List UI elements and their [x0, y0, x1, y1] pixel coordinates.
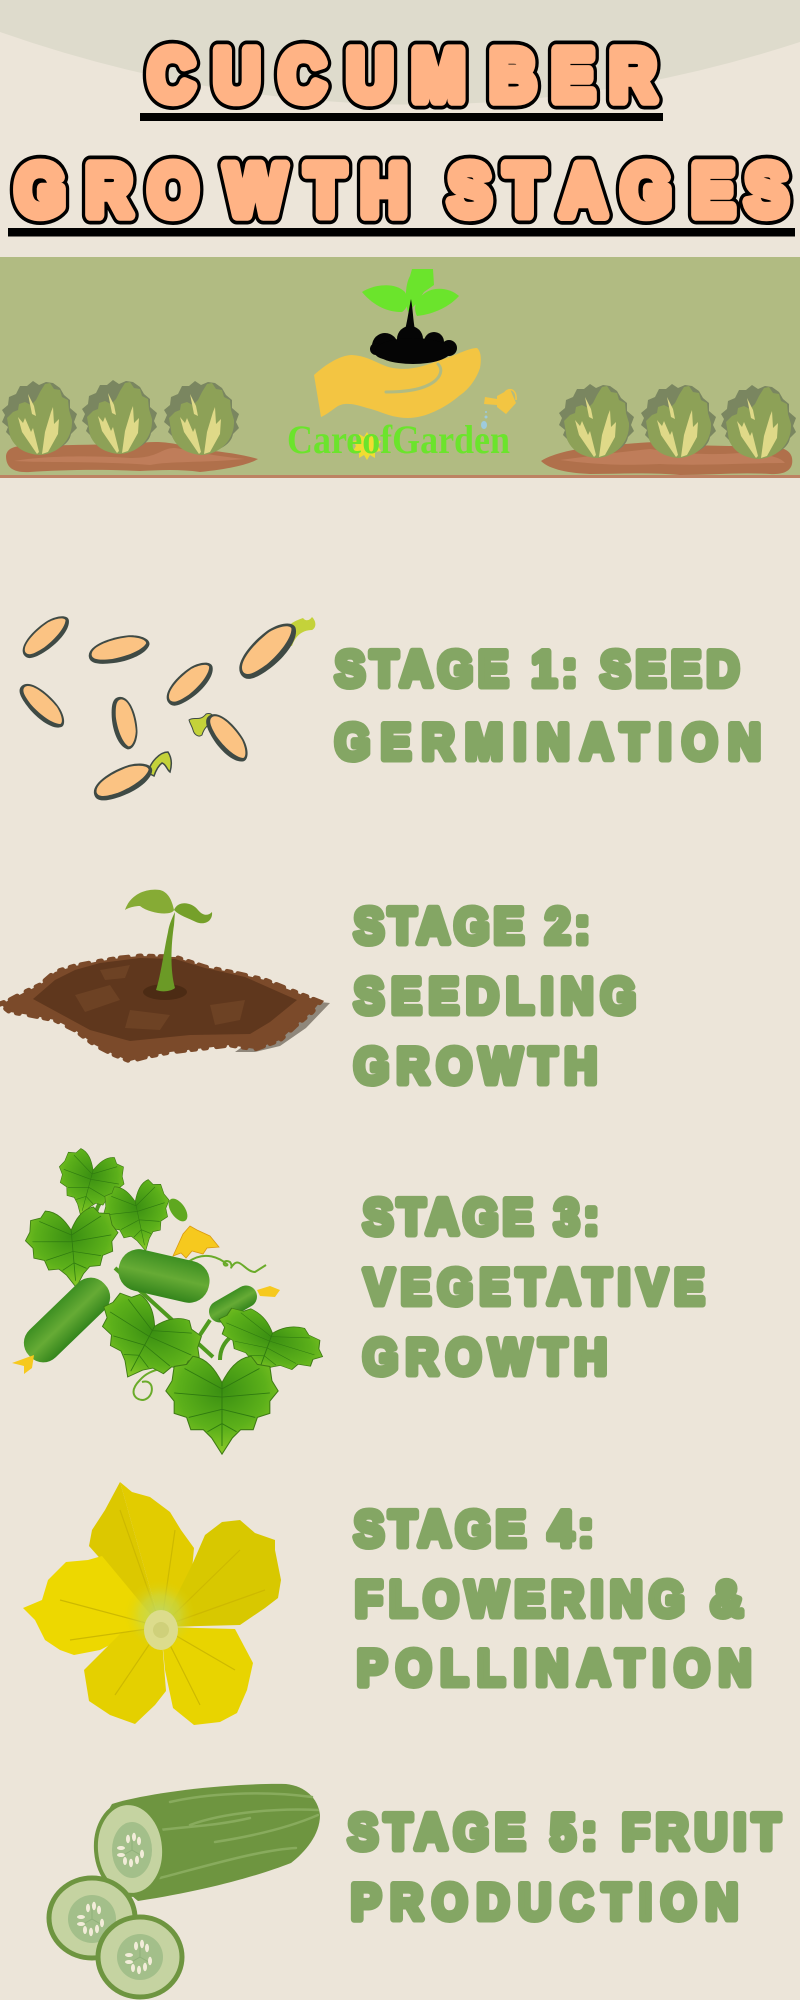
logo: care of garden [287, 269, 516, 462]
heading: stage 2: SEEDLING [354, 969, 636, 1025]
logo stem and soil [370, 299, 457, 364]
cucumber body [105, 1784, 320, 1901]
title line: growth stages: GROWTH STAGES [15, 151, 788, 231]
heading: stage 4 [354, 1502, 751, 1697]
lettuce row right [559, 384, 796, 459]
logo hand [314, 348, 481, 418]
logo watering can [481, 389, 516, 429]
heading: stage 2: STAGE 2: [354, 899, 590, 955]
heading: stage 5: PRODUCTION [351, 1875, 738, 1931]
banner panel [0, 257, 800, 478]
icon: seeds [15, 610, 315, 806]
logo wordmark: CareofGarden [287, 417, 510, 462]
heading: stage 4: FLOWERING & [355, 1572, 743, 1628]
slice 2 [49, 1878, 135, 1958]
stage 2: seedling growth [0, 890, 636, 1095]
title line: growth stages: GROWTH STAGES [15, 151, 788, 231]
title line: cucumber: CUCUMBER [149, 36, 656, 116]
stage 1: seed germination [15, 610, 761, 806]
title line: cucumber: CUCUMBER [149, 36, 656, 116]
heading: stage 3 [363, 1190, 704, 1386]
heading: stage 3: GROWTH [363, 1330, 607, 1386]
cut face [92, 1800, 168, 1898]
heading: stage 4: STAGE 4: [354, 1502, 593, 1558]
icon: seedling in soil [0, 890, 330, 1061]
soil bed left [6, 442, 258, 472]
logo sun [353, 432, 381, 460]
logo leaves [362, 269, 459, 316]
heading: stage 2: GROWTH [354, 1039, 597, 1095]
heading: stage 3: VEGETATIVE [364, 1260, 704, 1316]
heading: stage 3: STAGE 3: [363, 1190, 599, 1246]
heading: stage 2 [354, 899, 636, 1095]
heading: stage 1: STAGE 1: SEED [335, 642, 739, 698]
heading: stage 5 [348, 1805, 780, 1931]
icon: yellow flower [23, 1482, 281, 1725]
title [8, 36, 795, 237]
slice 3 [98, 1917, 182, 1997]
heading: stage 5: STAGE 5: FRUIT [348, 1805, 780, 1861]
icon: cucumber vine [12, 1144, 330, 1454]
soil bed right [541, 442, 792, 475]
stage 4: flowering and pollination [23, 1482, 751, 1725]
icon: sliced cucumber [49, 1784, 320, 1997]
heading: stage 1: GERMINATION [335, 715, 761, 771]
stage 3: vegetative growth [12, 1144, 704, 1454]
heading: stage 1 [335, 642, 761, 771]
heading: stage 4: POLLINATION [357, 1641, 751, 1697]
lettuce row left [2, 380, 239, 455]
stage 5: fruit production [49, 1784, 780, 1997]
